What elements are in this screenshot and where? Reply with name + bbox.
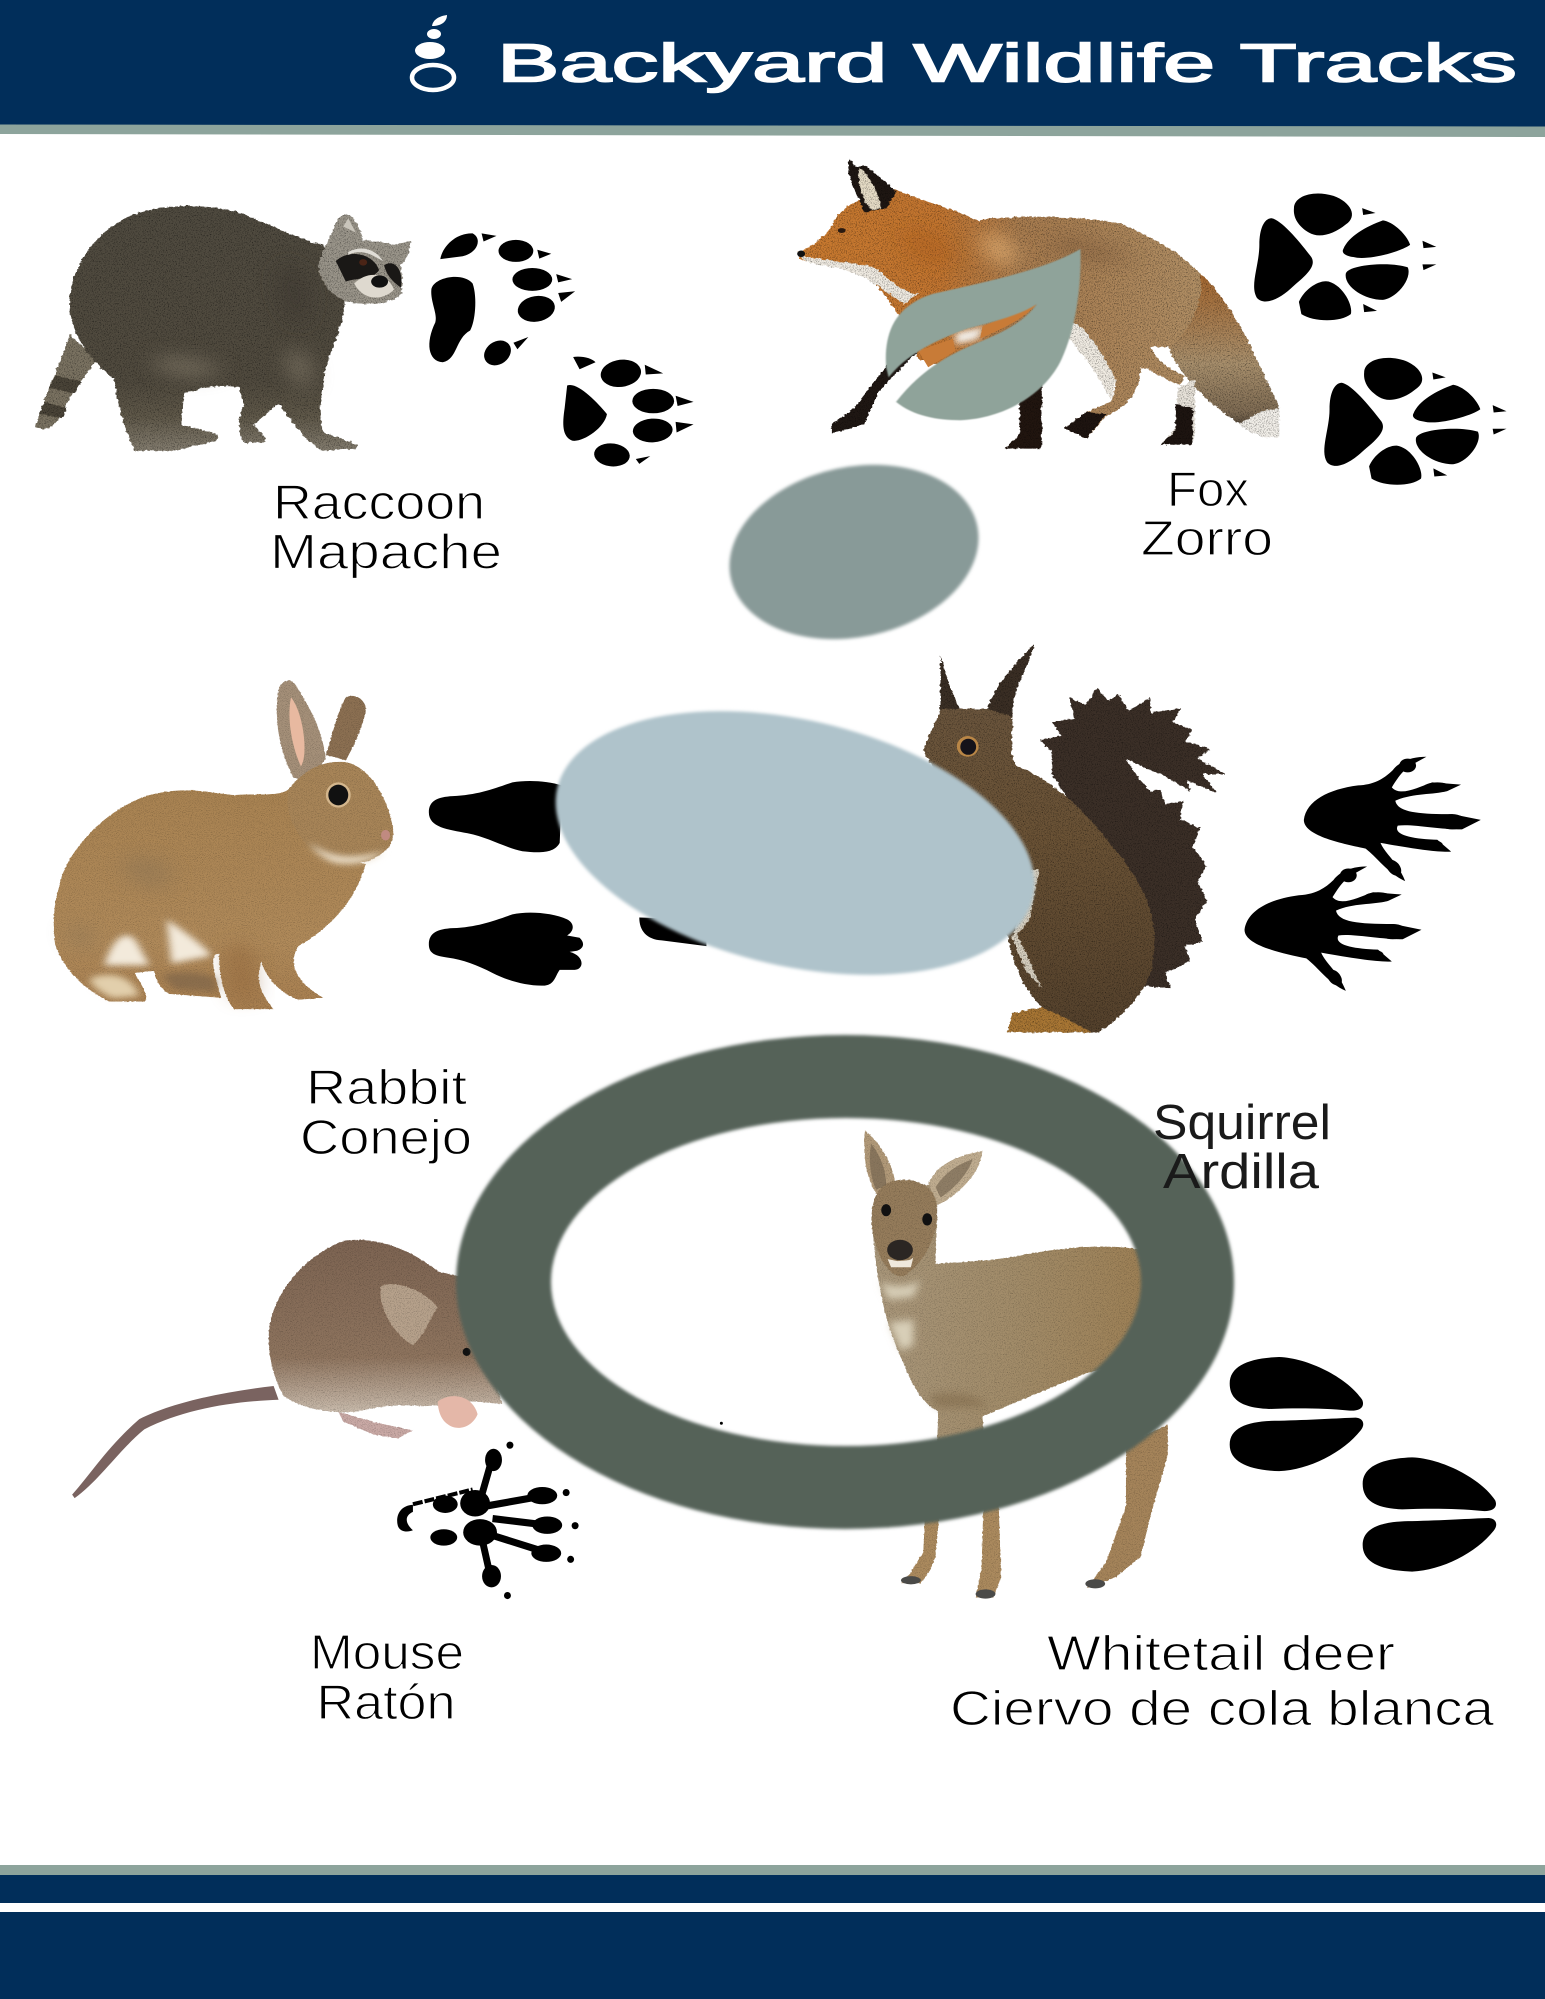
label: deer: Ciervo de cola blanca <box>950 1682 1495 1736</box>
label: squirrel: Squirrel <box>1153 1096 1331 1150</box>
label: deer: Whitetail deer <box>1047 1627 1395 1681</box>
label: rabbit: Rabbit <box>306 1061 467 1115</box>
label: mouse: Mouse <box>310 1626 464 1680</box>
label: deer <box>950 1627 1495 1736</box>
icon: stacked stones logo <box>412 15 454 90</box>
label: mouse <box>310 1626 464 1730</box>
footer bands <box>0 1865 1545 1999</box>
animal: squirrel <box>923 644 1226 1032</box>
animal: deer <box>864 1130 1168 1599</box>
tracks: mouse print <box>397 1422 723 1599</box>
tracks: raccoon prints <box>429 233 694 469</box>
label: raccoon: Mapache <box>270 526 502 580</box>
label: rabbit <box>300 1061 472 1165</box>
animal: mouse <box>72 1240 502 1498</box>
tracks: rabbit prints <box>429 781 706 986</box>
title: Backyard Wildlife Tracks <box>497 34 1517 94</box>
label: mouse: Ratón <box>316 1676 456 1730</box>
label: fox: Fox <box>1167 463 1249 517</box>
stone: pale blue oval <box>530 668 1060 1018</box>
label: raccoon <box>270 476 502 580</box>
label: fox: Zorro <box>1141 512 1273 566</box>
label: rabbit: Conejo <box>300 1111 472 1165</box>
stone: grey oval <box>713 443 995 661</box>
label: raccoon: Raccoon <box>273 476 485 530</box>
animal: raccoon <box>36 206 410 451</box>
dark green ring <box>456 1035 1234 1529</box>
header banner <box>0 0 1545 137</box>
label: squirrel <box>1153 1096 1331 1199</box>
tracks: deer prints <box>1230 1357 1496 1572</box>
tracks: squirrel prints <box>1245 757 1481 991</box>
animal: fox <box>797 159 1279 449</box>
leaf shape overlay <box>886 249 1081 420</box>
label: squirrel: Ardilla <box>1163 1145 1320 1199</box>
tracks: fox prints <box>1254 193 1507 485</box>
animal: rabbit <box>54 680 393 1009</box>
label: fox <box>1141 463 1273 566</box>
